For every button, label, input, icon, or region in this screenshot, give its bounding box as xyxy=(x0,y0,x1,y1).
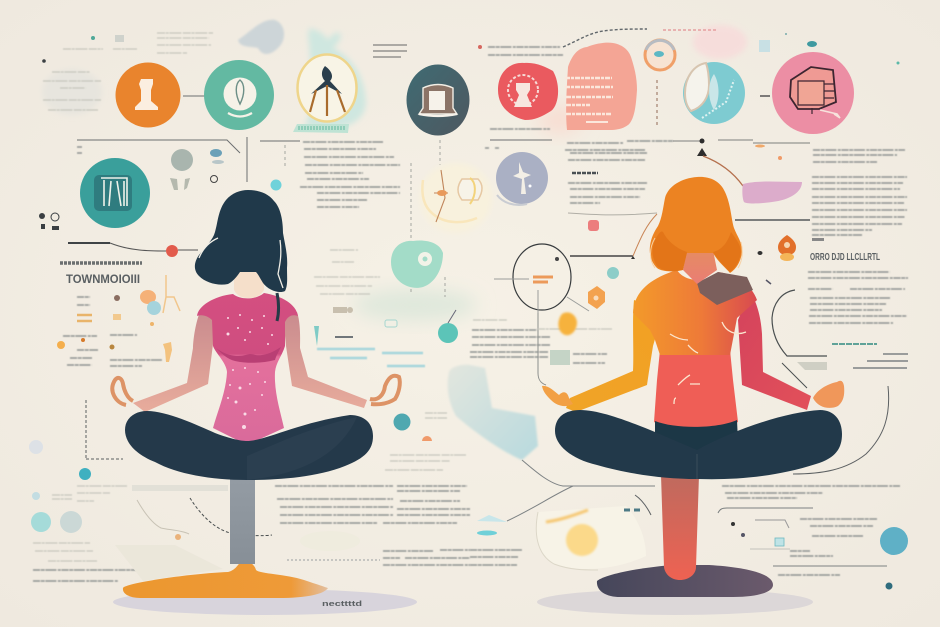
hand: right xyxy=(813,381,844,408)
hands xyxy=(112,376,400,405)
post xyxy=(230,475,255,564)
heading: right garbled title: ORRO DJD LLCLLRTL xyxy=(810,251,880,263)
text block: right middle xyxy=(808,251,908,323)
panel: teal notes xyxy=(314,250,425,366)
line xyxy=(520,584,593,586)
legs xyxy=(555,410,842,479)
text block: upper right xyxy=(812,143,907,241)
icon: red figure circle xyxy=(498,63,558,120)
panel: top icon row xyxy=(91,20,900,136)
icon: cream plate with ring xyxy=(420,163,492,233)
shadow xyxy=(113,589,417,615)
arm: left orange xyxy=(566,300,663,412)
neck xyxy=(234,270,264,298)
hair highlight xyxy=(199,238,283,288)
strap xyxy=(277,293,278,321)
icon: small ring xyxy=(645,40,675,70)
heading: left garbled title: TOWNMOIOIII xyxy=(66,272,140,286)
pale wash: peach glow by red icon xyxy=(538,106,582,134)
torso lower xyxy=(654,350,738,430)
connector xyxy=(760,95,770,97)
small icons: grey blob and shapes xyxy=(168,149,282,200)
decorative blob: pale pink xyxy=(693,25,747,59)
post xyxy=(661,475,699,580)
text block: top centre xyxy=(478,29,717,55)
connector lines: lower centre xyxy=(507,460,655,521)
text fragments: left of teal xyxy=(77,147,82,153)
shirt xyxy=(197,293,298,445)
text: grey circle header xyxy=(485,129,550,148)
text block: top left notes xyxy=(42,33,213,115)
leg fold xyxy=(247,417,357,480)
hand: left xyxy=(542,386,573,406)
icon: teal bag behind figure xyxy=(304,28,366,128)
hair shade xyxy=(653,231,741,272)
speckles xyxy=(226,314,273,429)
right arc annotations xyxy=(772,290,908,474)
text block: centre column xyxy=(565,141,673,215)
icon: dark bell circle xyxy=(406,64,470,136)
panel: lower left notes xyxy=(31,485,272,581)
chest xyxy=(633,270,757,355)
small icons: left faces xyxy=(39,213,59,230)
small orange teardrop icon xyxy=(758,235,796,284)
small chart marks: left cluster xyxy=(57,275,180,372)
text block: lower right xyxy=(718,486,900,575)
hair xyxy=(195,190,287,292)
base xyxy=(123,562,328,598)
figure: left woman xyxy=(112,190,417,615)
icon: teal bookshelf circle xyxy=(80,158,150,228)
icon: blue droplet circle xyxy=(683,62,745,124)
legs xyxy=(125,411,373,480)
decorative blob: grey-blue cloud xyxy=(238,20,284,54)
panel: peach text card xyxy=(565,43,637,130)
icon: small drop xyxy=(886,582,892,590)
connector line: left xyxy=(77,137,300,182)
dashed guides xyxy=(285,140,445,297)
hair xyxy=(650,177,742,273)
diagram: circle with annotations xyxy=(473,214,657,385)
icon: grey figure circle xyxy=(496,152,548,205)
dashed connector xyxy=(656,80,658,128)
connector with marker: pink note xyxy=(673,138,810,220)
pale wash: centre green xyxy=(353,289,477,321)
map-like pale shape xyxy=(448,365,538,460)
text block: centre right stack xyxy=(470,312,612,365)
arms xyxy=(133,312,367,412)
text lines: right of figure xyxy=(373,45,407,57)
icon: teal dot xyxy=(880,527,908,555)
hair strand highlight xyxy=(650,238,742,268)
small icons: light blue marks xyxy=(438,310,522,565)
waistband xyxy=(655,420,738,454)
icon: green leaf blob xyxy=(391,240,443,288)
connector xyxy=(183,95,205,97)
base xyxy=(597,565,773,597)
text block: left with red marker xyxy=(60,243,198,305)
panel: centre lower text xyxy=(275,413,470,565)
leg fold xyxy=(696,454,698,479)
shoulder shade xyxy=(697,272,753,305)
base label: necttttd xyxy=(322,601,362,608)
figure: right woman xyxy=(537,177,844,615)
shadow xyxy=(537,589,813,615)
icon: yellow ring with figure xyxy=(293,54,356,133)
small icons: pink, teal and orange marks xyxy=(588,220,630,309)
chest shade xyxy=(216,347,281,363)
small decorative icons: teal dots xyxy=(91,33,900,64)
icon: orange pawn circle xyxy=(116,62,180,128)
icon: pink pot circle xyxy=(772,52,854,134)
panel: yellow sun note xyxy=(536,495,651,570)
icon: green balloon circle xyxy=(204,60,274,130)
chest highlights xyxy=(670,322,746,404)
face and neck xyxy=(683,250,717,284)
text block: centre upper xyxy=(300,142,400,207)
chart: left axis xyxy=(29,400,127,480)
arm: right red xyxy=(738,292,811,410)
